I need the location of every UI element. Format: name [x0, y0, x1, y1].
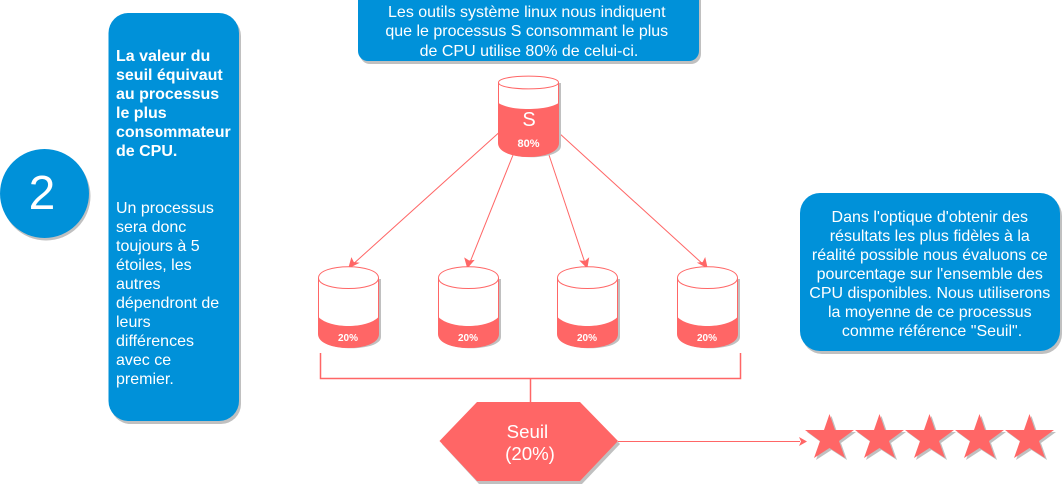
panel: linux tools callout: Les outils système linux nous indiquent [388, 4, 666, 21]
panel: average reference callout: CPU disponibles. Nous utiliserons [809, 285, 1050, 302]
panel: average reference callout [800, 193, 1062, 354]
cylinder: CPU 2 at 20%: 20% [458, 333, 478, 344]
panel: threshold explanation [108, 13, 241, 424]
body text: premier. [116, 371, 174, 388]
bracket grouping the cylinders into the threshold [320, 353, 740, 402]
cylinder: CPU 3 at 20%: 20% [577, 333, 597, 344]
hexagon: threshold 20%: Seuil [507, 421, 548, 442]
arrows from process S to the CPU cylinders [349, 133, 707, 268]
star shadows [807, 416, 1056, 460]
hexagon: threshold 20% [440, 402, 620, 484]
body text: toujours à 5 [116, 238, 200, 255]
panel: average reference callout: comme référence "Seuil". [842, 323, 1022, 340]
panel: average reference callout: résultats les plus fidèles à la [830, 228, 1030, 245]
step number badge [0, 149, 90, 240]
star fills [805, 414, 1054, 458]
body text: dépendront de [116, 295, 219, 312]
panel: average reference callout: pourcentage sur l'ensemble des [817, 266, 1043, 283]
body text: autres [116, 276, 160, 293]
step number badge: 2 [29, 167, 55, 220]
body text: étoiles, les [116, 257, 192, 274]
body text: sera donc [116, 219, 186, 236]
panel: average reference callout: Dans l'optique d'obtenir des [832, 209, 1028, 226]
cylinder: process S 80%: 80% [517, 138, 540, 150]
bold heading text: le plus [116, 105, 167, 122]
arrow from threshold to stars [618, 437, 807, 446]
body text: Un processus [116, 200, 214, 217]
cylinder: process S 80%: S [522, 109, 536, 131]
panel: average reference callout: la moyenne de ce processus [828, 304, 1032, 321]
five star rating [805, 414, 1056, 460]
body text: différences [116, 333, 194, 350]
bold heading text: au processus [116, 86, 219, 103]
panel: average reference callout: réalité possible nous évaluons ce [812, 247, 1048, 264]
bold heading text: seuil équivaut [116, 67, 223, 84]
body text: avec ce [116, 352, 171, 369]
cylinder: CPU 4 at 20% [678, 267, 740, 348]
bold heading text: consommateur [116, 124, 231, 141]
bold heading text: de CPU. [116, 143, 177, 160]
panel: linux tools callout [358, 0, 701, 64]
body text: leurs [116, 314, 151, 331]
hexagon: threshold 20%: (20%) [505, 443, 555, 464]
cylinder: CPU 2 at 20% [438, 267, 501, 348]
bold heading text: La valeur du [116, 48, 210, 65]
panel: linux tools callout: que le processus S consommant le plus [385, 23, 668, 40]
cylinder: CPU 3 at 20% [558, 267, 620, 348]
panel: linux tools callout: de CPU utilise 80% de celui-ci. [420, 43, 638, 60]
cylinder: process S 80% [498, 76, 561, 157]
cylinder: CPU 4 at 20%: 20% [697, 333, 717, 344]
cylinder: CPU 1 at 20% [318, 267, 381, 348]
cylinder: CPU 1 at 20%: 20% [338, 333, 358, 344]
